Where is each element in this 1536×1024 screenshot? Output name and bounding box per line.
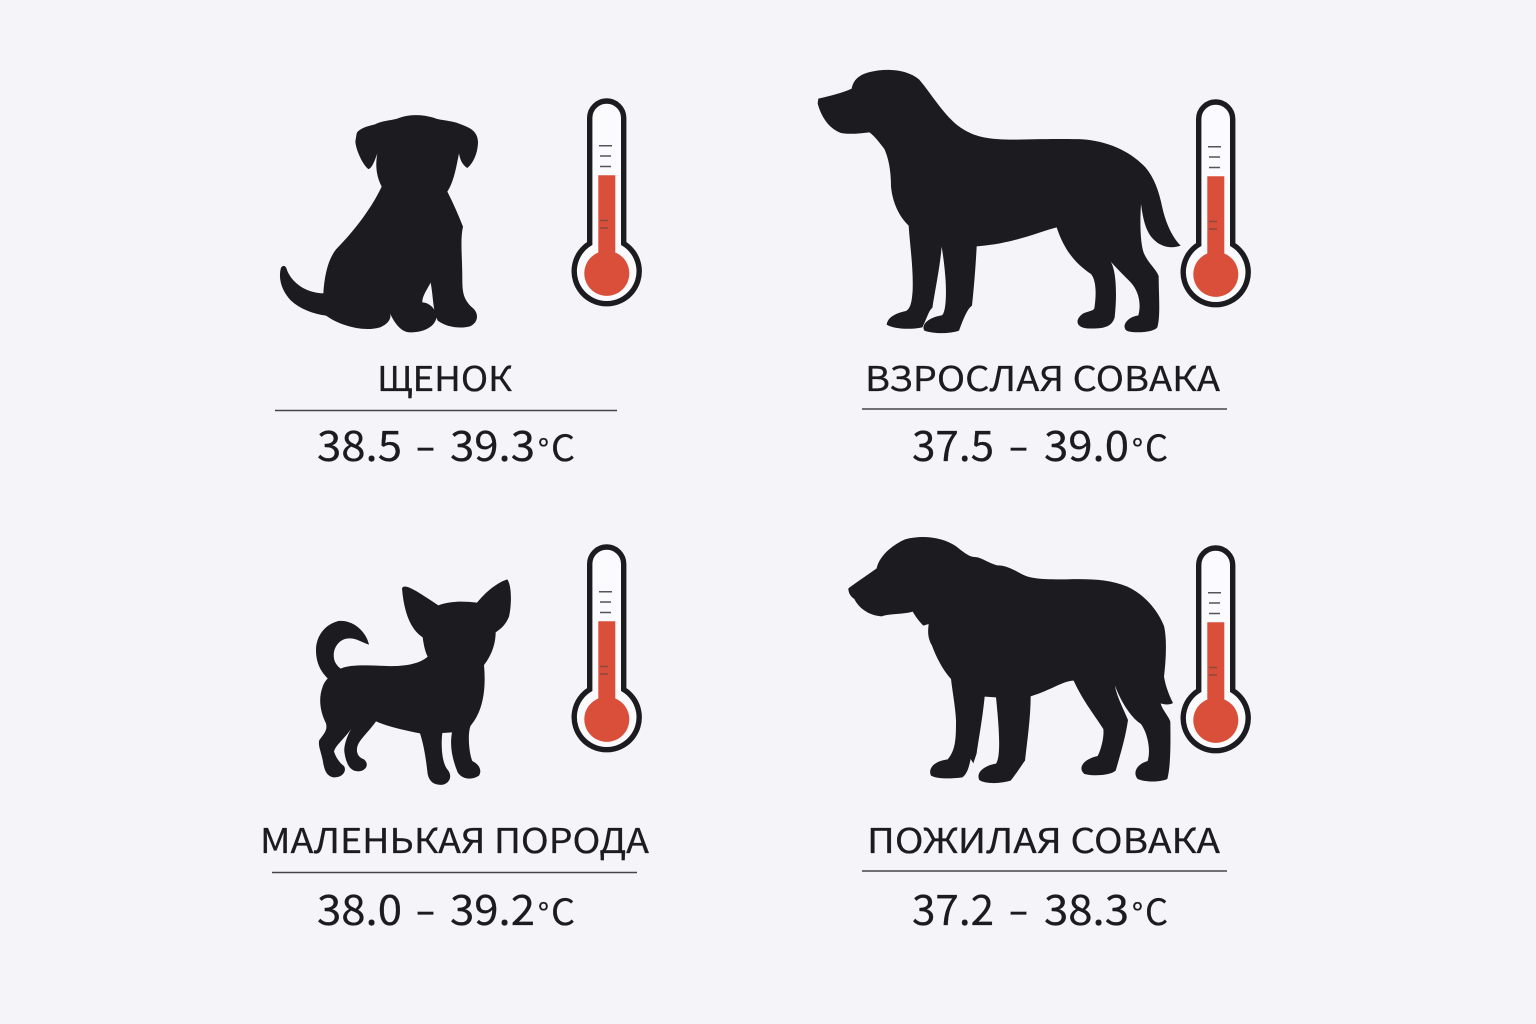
panel: senior dog bbox=[848, 537, 1248, 938]
temperature range: senior dog: C bbox=[1145, 884, 1168, 936]
temperature range: small breed bbox=[317, 877, 575, 938]
temperature range: small breed: ° bbox=[538, 890, 549, 934]
temperature range: puppy: C bbox=[551, 420, 575, 472]
temperature range: senior dog: 38.3 bbox=[1044, 877, 1129, 938]
temperature range: puppy bbox=[317, 413, 575, 474]
temperature range: adult dog: – bbox=[1009, 413, 1028, 474]
heading: adult dog: ВЗРОСЛАЯ СОВАКА bbox=[865, 352, 1220, 401]
heading: small breed: МАЛЕНЬКАЯ ПОРОДА bbox=[260, 814, 649, 863]
panel: puppy bbox=[275, 101, 639, 474]
temperature range: small breed: – bbox=[416, 877, 435, 938]
icon: senior dog silhouette bbox=[848, 537, 1173, 783]
icon: thermometer bbox=[1183, 102, 1248, 305]
temperature range: small breed: C bbox=[551, 884, 575, 936]
temperature range: adult dog: 37.5 bbox=[912, 413, 994, 474]
icon: thermometer bbox=[1183, 548, 1248, 751]
icon: small breed silhouette bbox=[316, 579, 511, 785]
temperature range: puppy: 39.3 bbox=[450, 413, 535, 474]
temperature range: adult dog: C bbox=[1145, 420, 1168, 472]
temperature range: puppy: – bbox=[416, 413, 435, 474]
heading: puppy: ЩЕНОК bbox=[377, 352, 512, 401]
heading: senior dog: ПОЖИЛАЯ СОВАКА bbox=[867, 814, 1220, 863]
temperature range: senior dog: 37.2 bbox=[912, 877, 994, 938]
panel: adult dog bbox=[818, 70, 1248, 474]
icon: thermometer bbox=[574, 547, 639, 750]
temperature range: small breed: 39.2 bbox=[450, 877, 535, 938]
temperature range: adult dog: 39.0 bbox=[1044, 413, 1129, 474]
temperature range: senior dog: – bbox=[1009, 877, 1028, 938]
temperature range: puppy: ° bbox=[538, 426, 549, 470]
temperature range: adult dog: ° bbox=[1132, 426, 1143, 470]
panel: small breed bbox=[260, 547, 649, 938]
temperature range: senior dog bbox=[912, 877, 1168, 938]
temperature range: small breed: 38.0 bbox=[317, 877, 402, 938]
icon: thermometer bbox=[574, 101, 639, 304]
icon: puppy silhouette bbox=[280, 115, 478, 332]
temperature range: puppy: 38.5 bbox=[317, 413, 402, 474]
icon: adult dog silhouette bbox=[818, 70, 1181, 333]
temperature range: senior dog: ° bbox=[1132, 890, 1143, 934]
temperature range: adult dog bbox=[912, 413, 1168, 474]
